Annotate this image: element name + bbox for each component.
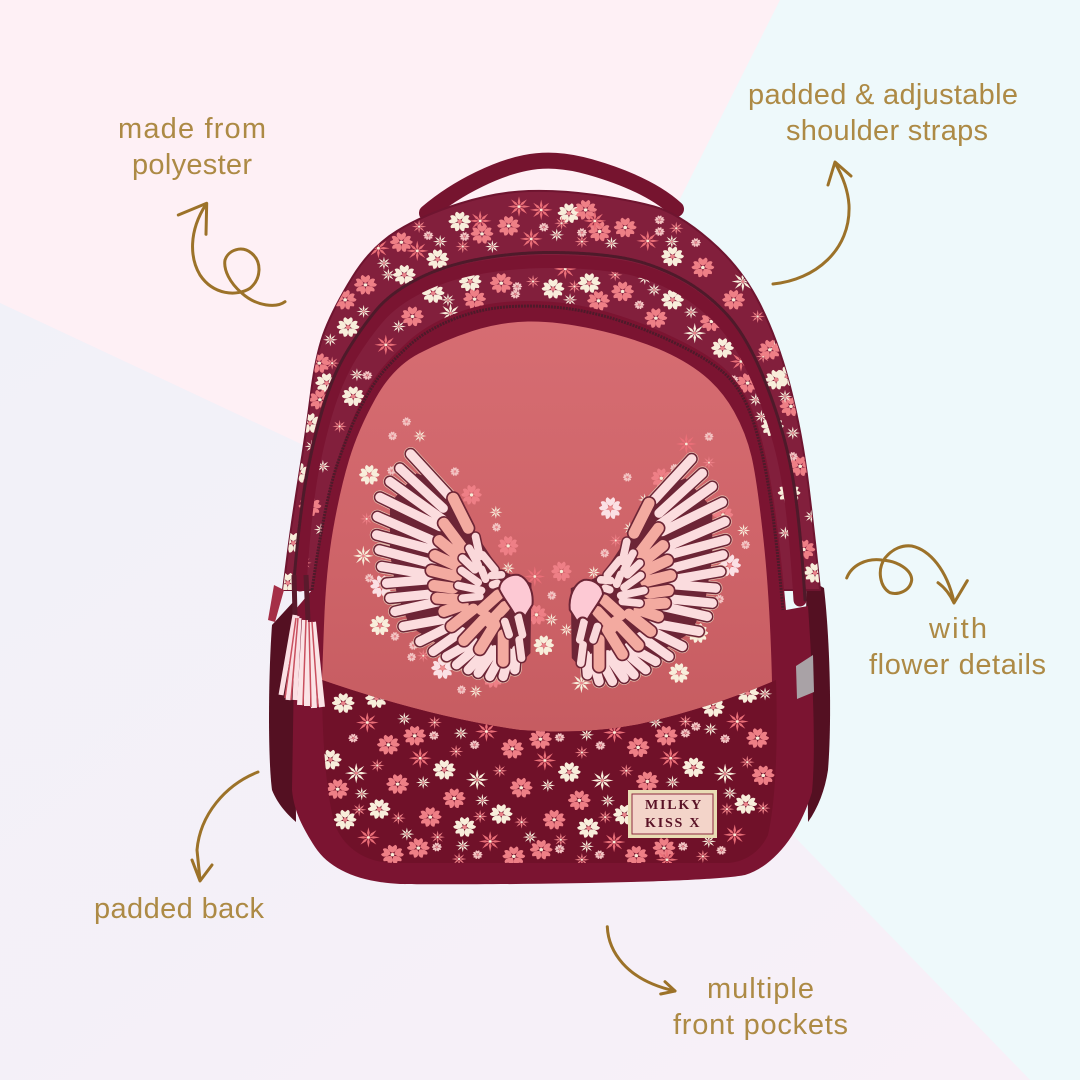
callout: shoulder straps: padded & adjustable: [748, 79, 1018, 111]
arrow: polyester: [178, 203, 285, 305]
upper zip with seam band: [294, 252, 805, 600]
upper floral print: [276, 196, 827, 593]
arrow: flower details: [847, 546, 967, 603]
brand label: KISS X: [645, 816, 701, 831]
arrow: padded back: [192, 772, 258, 881]
arrow: shoulder straps: [773, 162, 851, 284]
left wing: [377, 454, 533, 676]
zipper pulls and tassels: [268, 575, 322, 708]
callout: front pockets: front pockets: [673, 1009, 848, 1041]
callout: made from polyester: polyester: [132, 149, 252, 181]
arrow: front pockets: [607, 927, 675, 994]
callout: front pockets: multiple: [707, 973, 814, 1005]
callout: flower details: [869, 613, 1046, 681]
callout: made from polyester: made from: [118, 113, 266, 145]
callout: padded back: padded back: [94, 893, 264, 925]
front shell: [292, 301, 814, 884]
left mesh side pocket: [269, 600, 296, 822]
callout: flower details: flower details: [869, 649, 1046, 681]
reflective strip: [796, 655, 814, 699]
scattered flowers around wings: [353, 417, 750, 698]
right mesh side pocket: [806, 578, 830, 822]
pink fabric panel: [322, 321, 772, 732]
callout: made from polyester: [118, 113, 266, 181]
lower floral pocket: [318, 680, 777, 870]
callout: flower details: with: [928, 613, 987, 645]
right wing: [570, 459, 726, 681]
front zip: [312, 306, 783, 610]
callout: shoulder straps: [748, 79, 1018, 147]
callout: shoulder straps: shoulder straps: [786, 115, 988, 147]
brand label: [628, 790, 717, 838]
backpack: [268, 161, 830, 884]
callout: front pockets: [673, 973, 848, 1041]
brand label: MILKY: [645, 798, 703, 813]
top carry handle: [427, 161, 676, 213]
upper body panel: [283, 191, 820, 590]
